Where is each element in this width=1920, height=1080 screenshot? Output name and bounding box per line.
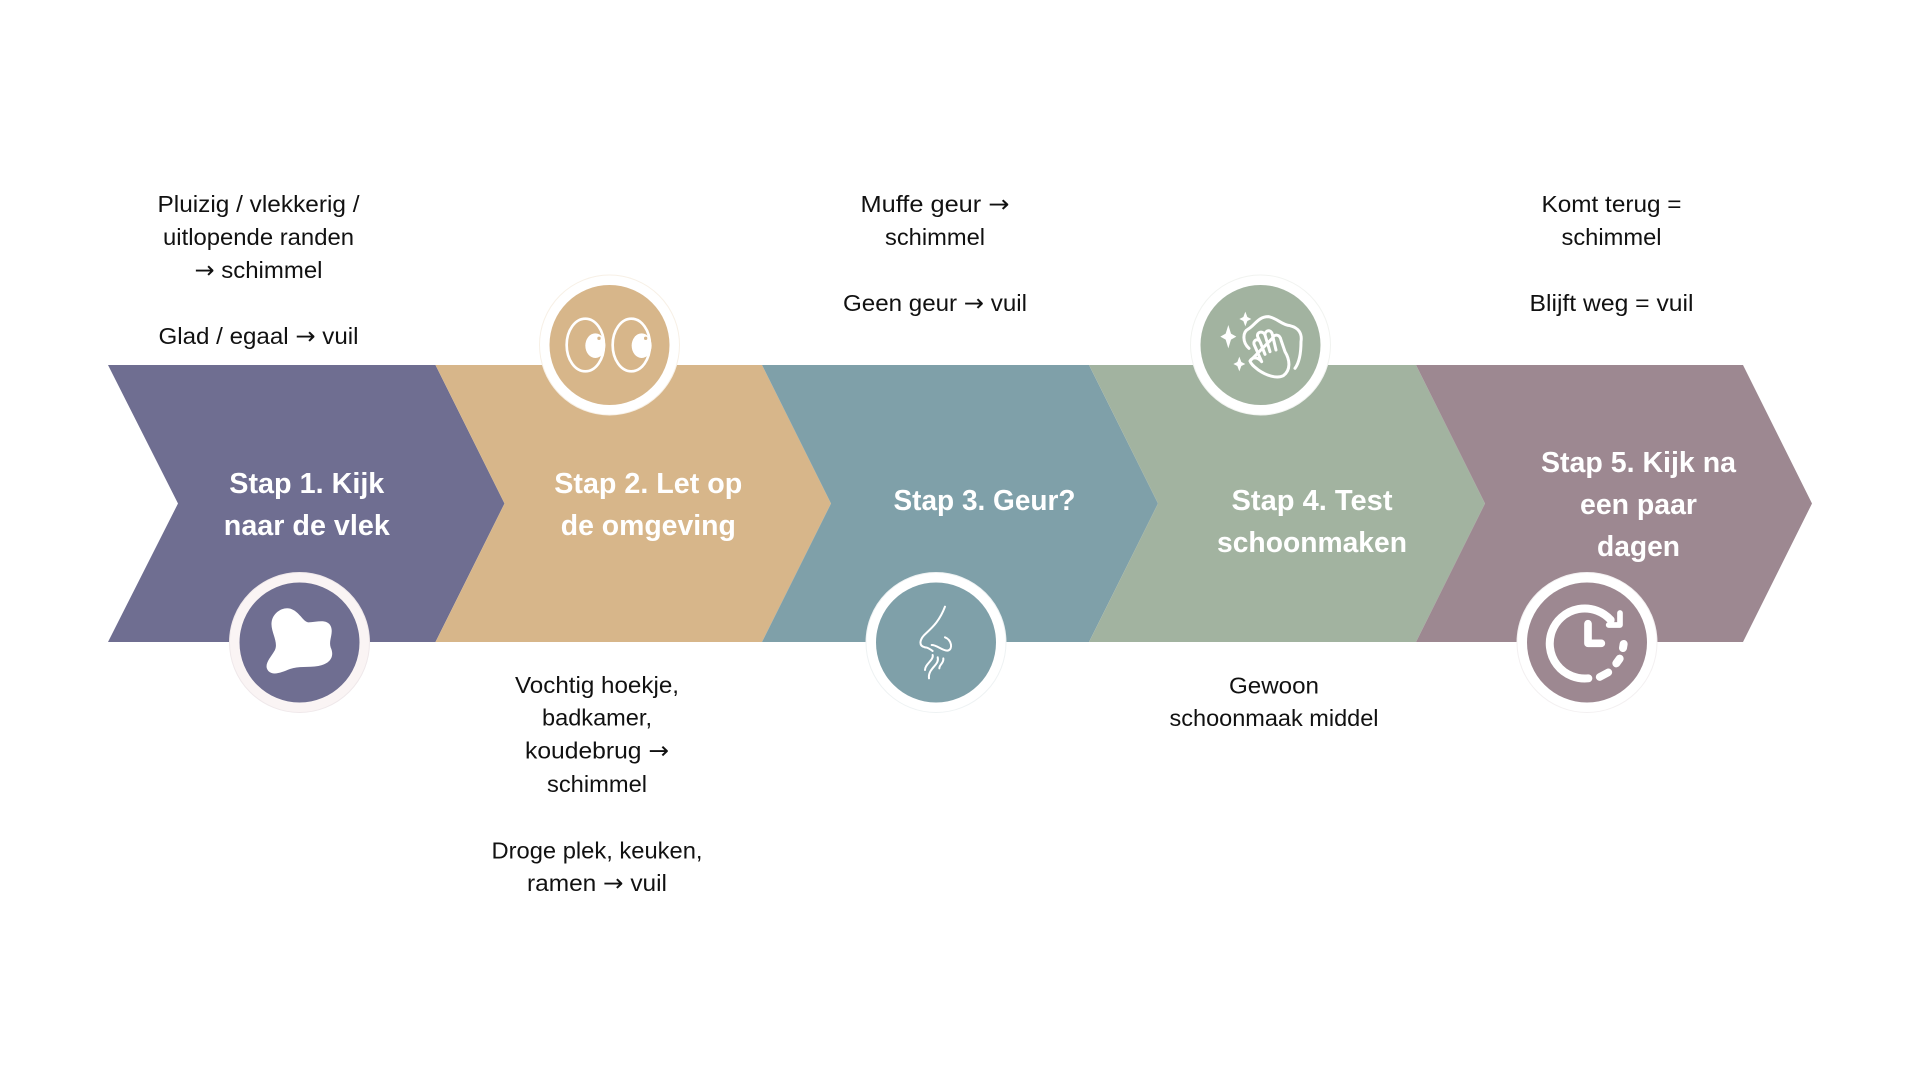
heading: step 1: naar de vlek [224, 510, 391, 542]
text block: step 2 notes [492, 672, 702, 897]
text block: step 2 notes: Droge plek, keuken, [492, 838, 702, 864]
heading: step 4: Stap 4. Test [1232, 485, 1393, 517]
chevron step 2 [436, 365, 831, 642]
text block: step 2 notes: koudebrug → [525, 736, 669, 764]
heading: step 5: een paar [1580, 489, 1697, 521]
heading: step 2: de omgeving [561, 510, 736, 542]
heading: step 5: Stap 5. Kijk na [1541, 447, 1737, 479]
text block: step 3 notes: Muffe geur → [860, 190, 1010, 218]
heading: step 2: Stap 2. Let op [554, 468, 742, 500]
text block: step 3 notes [843, 190, 1027, 317]
heading: step 4 [1217, 485, 1407, 559]
heading: step 1 [224, 468, 391, 542]
text block: step 2 notes: schimmel [547, 771, 647, 797]
text block: step 3 notes: Geen geur → vuil [843, 289, 1027, 317]
heading: step 2 [554, 468, 742, 542]
text block: step 2 notes: badkamer, [542, 704, 652, 730]
icon: nose [866, 572, 1006, 712]
icon: stain [230, 572, 370, 712]
icon: clock with return arrow [1517, 572, 1657, 712]
heading: step 3: Stap 3. Geur? [894, 485, 1076, 517]
text block: step 2 notes: ramen → vuil [527, 869, 667, 897]
text block: step 5 notes: Komt terug = [1542, 191, 1682, 217]
text block: step 3 notes: schimmel [885, 224, 985, 250]
text block: step 1 notes: Pluizig / vlekkerig / [158, 191, 360, 217]
text block: step 5 notes [1530, 191, 1694, 316]
heading: step 5: dagen [1597, 531, 1680, 563]
text block: step 4 notes [1170, 672, 1378, 731]
text block: step 5 notes: Blijft weg = vuil [1530, 290, 1694, 316]
text block: step 1 notes: uitlopende randen [163, 224, 354, 250]
text block: step 5 notes: schimmel [1562, 224, 1662, 250]
text block: step 1 notes: → schimmel [194, 256, 322, 284]
heading: step 5 [1541, 447, 1737, 563]
chevron step 5 [1416, 365, 1812, 642]
text block: step 2 notes: Vochtig hoekje, [515, 672, 679, 698]
chevron step 3 [762, 365, 1158, 642]
chevron step 1 [108, 365, 504, 642]
text block: step 1 notes [158, 191, 360, 350]
text block: step 1 notes: Glad / egaal → vuil [158, 322, 358, 350]
heading: step 1: Stap 1. Kijk [229, 468, 385, 500]
text block: step 4 notes: Gewoon [1229, 672, 1319, 698]
icon: cleaning hand [1190, 275, 1330, 415]
chevron step 4 [1089, 365, 1485, 642]
icon: eyes [540, 275, 680, 415]
text block: step 4 notes: schoonmaak middel [1170, 705, 1378, 731]
heading: step 4: schoonmaken [1217, 527, 1407, 559]
